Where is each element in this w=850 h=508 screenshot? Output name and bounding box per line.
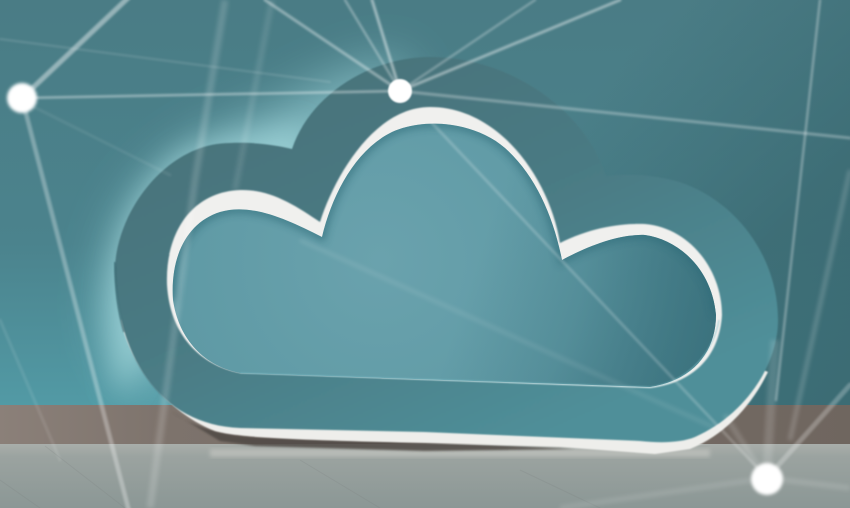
cloud outer body bbox=[115, 57, 778, 442]
network node: left bbox=[7, 83, 37, 113]
network node: top bbox=[388, 79, 412, 103]
cloud inner recess bbox=[172, 124, 716, 387]
cloud inner bottom highlight bbox=[240, 320, 719, 387]
cloud left edge shadow bbox=[115, 262, 124, 332]
floor bbox=[0, 444, 850, 508]
cloud shadow on floor bbox=[172, 412, 575, 451]
cloud inner white edge bbox=[167, 107, 722, 388]
glow behind cloud bbox=[108, 60, 410, 400]
wall background bbox=[0, 0, 850, 406]
baseboard bbox=[0, 405, 850, 445]
network node: bottom right bbox=[751, 463, 783, 495]
cloud white bottom rim bbox=[121, 300, 768, 454]
cloud bbox=[115, 57, 778, 454]
